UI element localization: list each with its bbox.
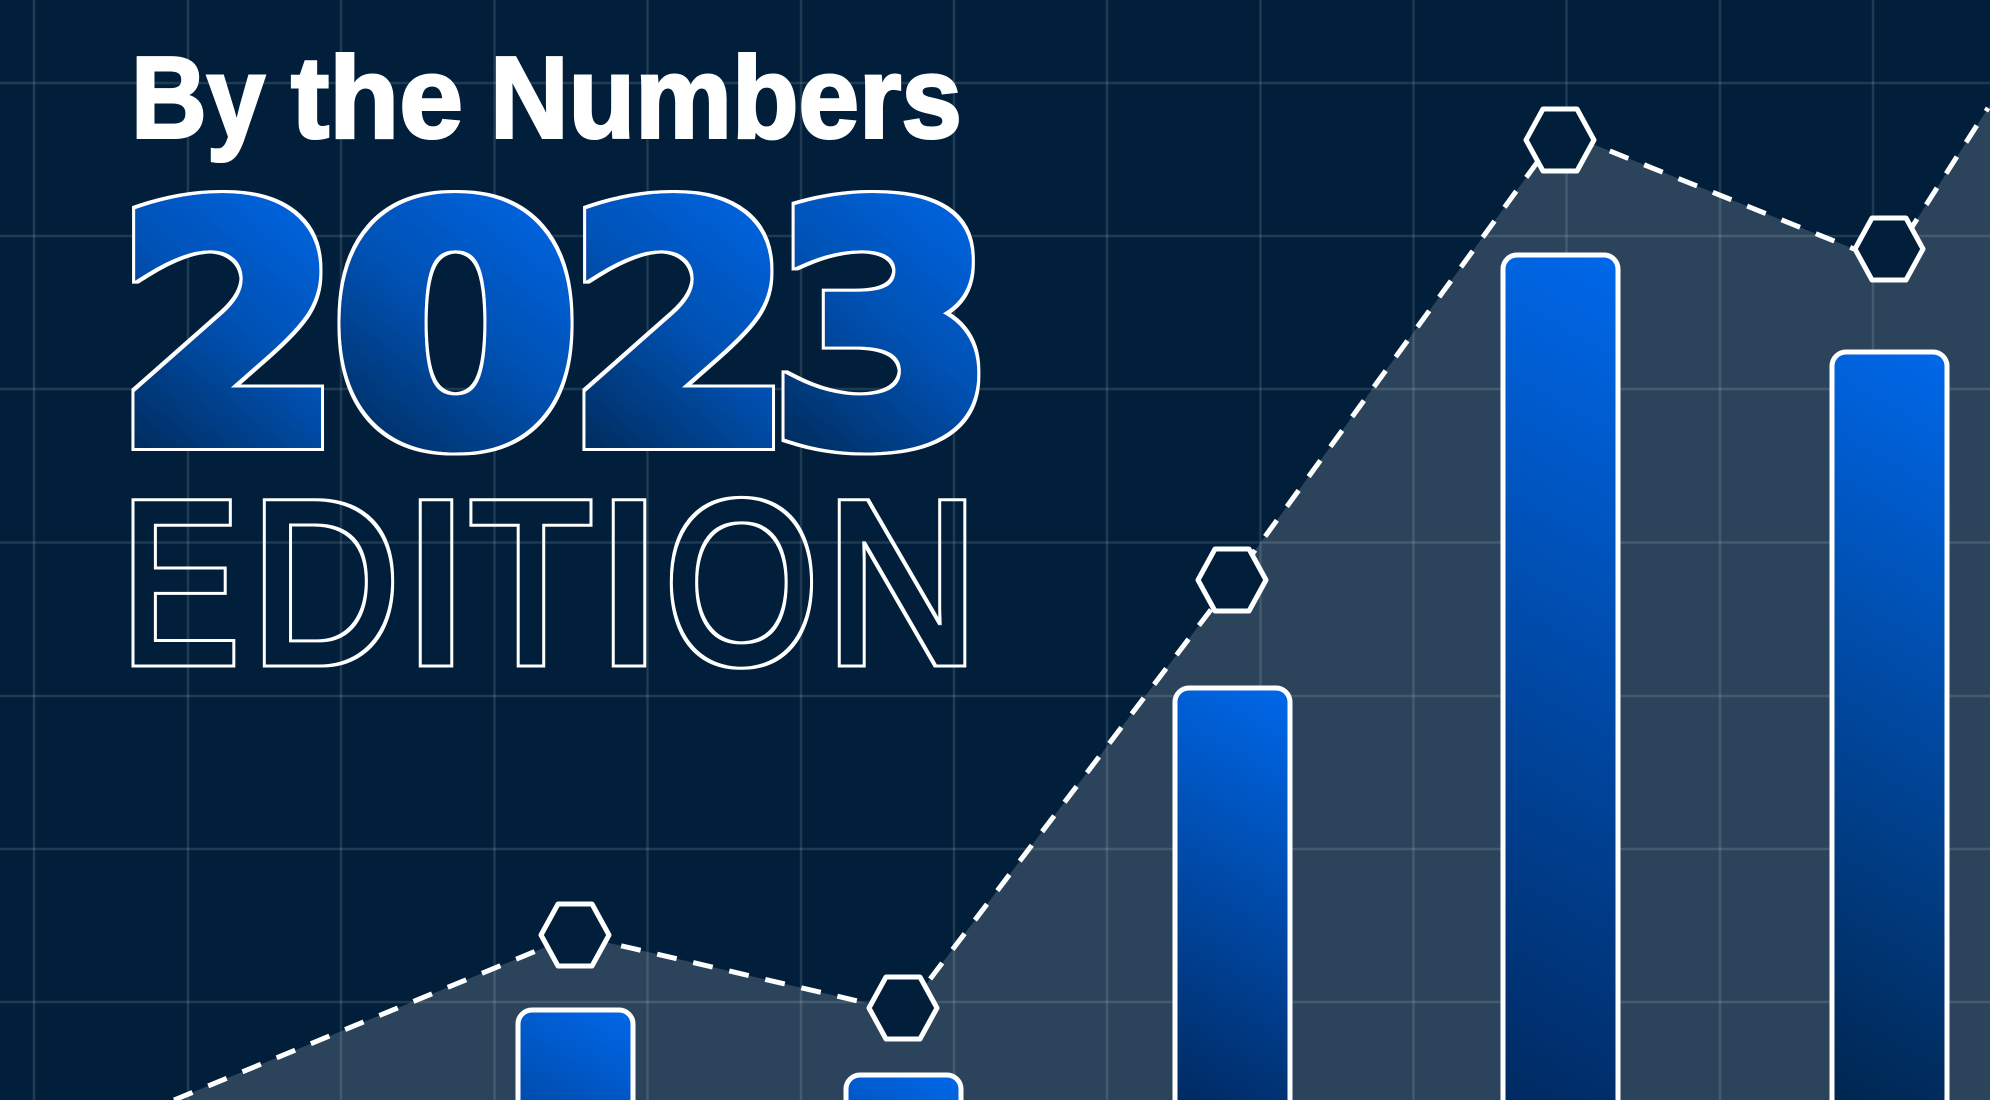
heading: 2023: 2 — [568, 141, 792, 516]
bar 4 — [1503, 255, 1618, 1100]
title: By the Numbers: By — [131, 32, 265, 162]
heading: EDITION outline: I — [402, 454, 470, 711]
heading: EDITION outline: T — [470, 454, 592, 711]
bar 2 — [846, 1075, 961, 1100]
marker 3 — [1198, 549, 1266, 611]
bar 3 — [1175, 688, 1290, 1100]
heading: 2023: 2 — [117, 141, 341, 516]
chart: hexagon markers — [541, 109, 1923, 1039]
heading: 2023 — [117, 141, 995, 516]
heading: 2023: 0 — [332, 141, 579, 516]
chart: bars — [518, 255, 1947, 1100]
bar 5 — [1832, 352, 1947, 1100]
heading: EDITION outline: D — [251, 455, 399, 712]
marker 1 — [541, 904, 609, 966]
marker 5 — [1855, 218, 1923, 280]
heading: EDITION outline: E — [122, 455, 238, 712]
title: By the Numbers: Numbers — [490, 32, 962, 162]
heading: EDITION outline: N — [826, 454, 978, 711]
marker 4 — [1526, 109, 1594, 171]
marker 2 — [869, 977, 937, 1039]
bar 1 — [518, 1010, 633, 1100]
heading: EDITION outline — [122, 454, 978, 712]
title: By the Numbers: the — [291, 32, 463, 162]
title: By the Numbers — [131, 32, 962, 162]
heading: EDITION outline: O — [665, 455, 818, 712]
heading: EDITION outline: I — [595, 454, 663, 711]
heading: 2023: 3 — [771, 141, 995, 516]
